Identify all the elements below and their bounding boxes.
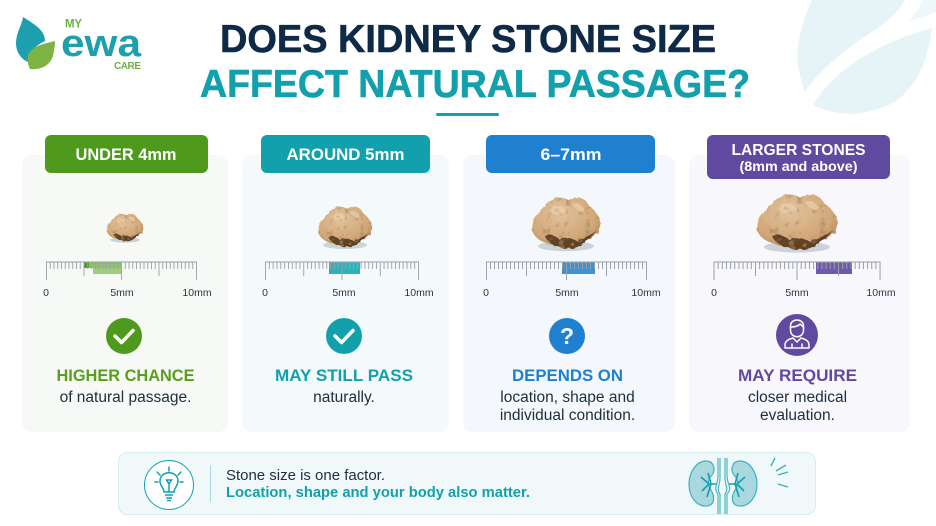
title [200, 18, 750, 106]
card [22, 155, 228, 432]
callout text: Stone size is one factor. [226, 467, 385, 484]
callout text [226, 467, 530, 501]
result text: individual condition. [500, 407, 635, 424]
panel: 6-7mm [463, 135, 675, 432]
size header [45, 135, 208, 173]
panel: under 4mm [22, 135, 228, 432]
stone [756, 195, 838, 253]
callout text: Location, shape and your body also matter. [226, 484, 530, 501]
result text: MAY REQUIRE [738, 366, 857, 385]
icon: check [106, 318, 142, 354]
card [689, 155, 910, 432]
ruler: 5mm [785, 287, 809, 299]
size header [707, 135, 890, 179]
result text [56, 366, 194, 406]
ruler [43, 262, 212, 299]
result text: location, shape and [500, 389, 635, 406]
size header: AROUND 5mm [286, 145, 404, 164]
result text [275, 366, 413, 406]
ruler [483, 262, 661, 299]
result text [500, 366, 635, 424]
callout background [118, 452, 816, 514]
icon: check [326, 318, 362, 354]
result text: closer medical [748, 389, 847, 406]
ruler: 0 [43, 287, 49, 299]
stone [107, 214, 143, 243]
ruler: 0 [262, 287, 268, 299]
icon: kidneys [689, 458, 788, 514]
icon: light bulb [144, 460, 194, 510]
title: DOES KIDNEY STONE SIZE [220, 18, 716, 61]
result text: HIGHER CHANCE [56, 366, 194, 385]
ruler: 10mm [631, 287, 661, 299]
result text: evaluation. [760, 407, 835, 424]
logo wordmark: CARE [114, 61, 141, 72]
icon: teal leaf [16, 17, 45, 62]
background leaf watermark [798, 0, 936, 114]
stone [318, 207, 372, 249]
icon: doctor [776, 314, 818, 356]
icon: question [549, 318, 585, 354]
icon: question: ? [560, 323, 574, 349]
result text: naturally. [313, 389, 375, 406]
ruler: 10mm [404, 287, 434, 299]
ruler: 10mm [866, 287, 896, 299]
panel: larger stones [689, 135, 910, 432]
ruler [711, 262, 896, 299]
card [463, 155, 675, 432]
ruler: 10mm [182, 287, 212, 299]
ruler: 5mm [332, 287, 356, 299]
logo wordmark: MY [65, 18, 82, 30]
stone [532, 197, 600, 251]
divider [210, 465, 211, 502]
size header: 6–7mm [540, 145, 602, 164]
ruler: 0 [483, 287, 489, 299]
card [242, 155, 449, 432]
ruler: 5mm [555, 287, 579, 299]
size header [261, 135, 430, 173]
logo wordmark: ewa [61, 23, 142, 65]
result text: of natural passage. [60, 389, 191, 406]
size header: UNDER 4mm [76, 145, 176, 164]
result text: MAY STILL PASS [275, 366, 413, 385]
logo [16, 17, 142, 72]
result text [738, 366, 857, 424]
size header: LARGER STONES [732, 142, 866, 159]
ruler: 0 [711, 287, 717, 299]
ruler [262, 262, 434, 299]
title: AFFECT NATURAL PASSAGE? [200, 63, 750, 106]
panel: around 5mm [242, 135, 449, 432]
title underline [436, 113, 499, 116]
ruler: 5mm [110, 287, 134, 299]
size header: (8mm and above) [740, 158, 858, 174]
logo wordmark [61, 18, 142, 72]
result text: DEPENDS ON [512, 366, 623, 385]
size header [486, 135, 655, 173]
icon: green leaf [28, 41, 55, 69]
callout bar [118, 452, 816, 514]
